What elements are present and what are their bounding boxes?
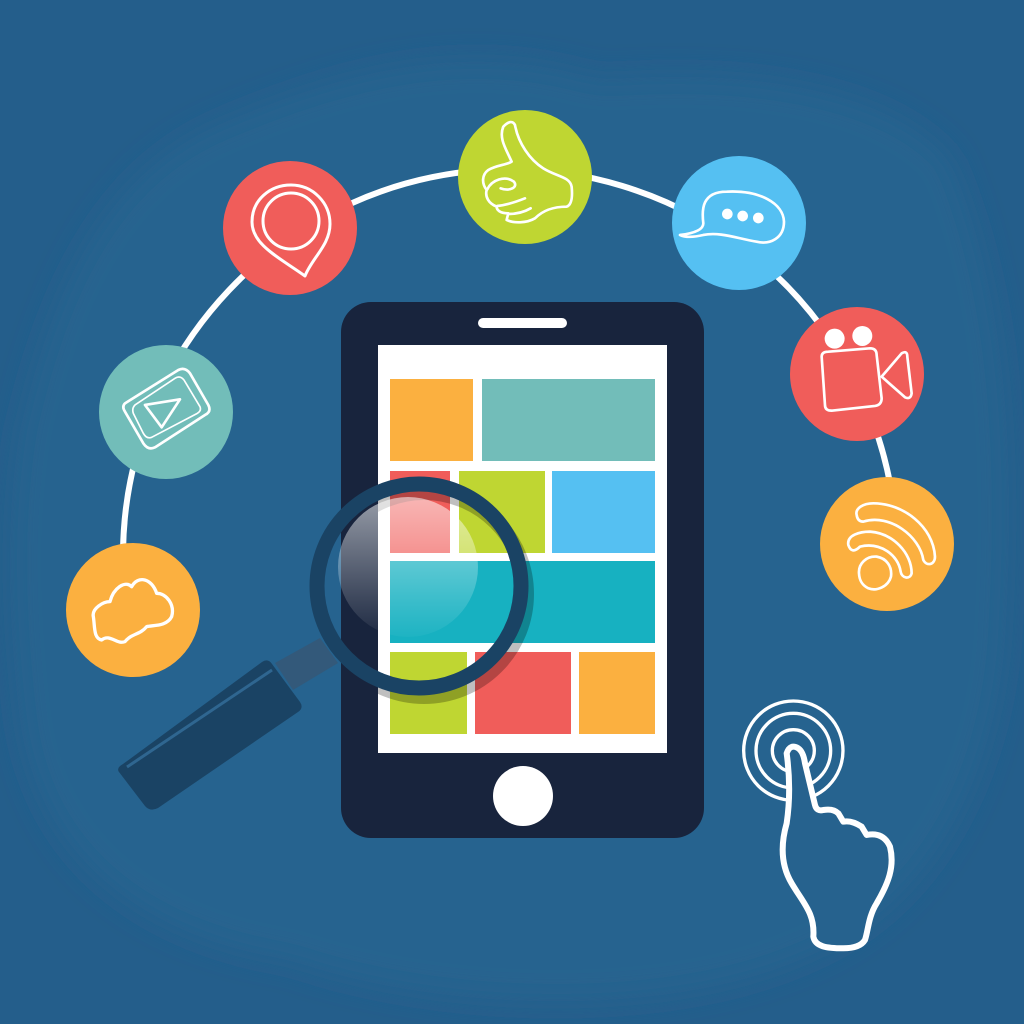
handle neck [275,638,338,690]
lens ring [317,484,521,688]
phone [341,302,704,838]
hand outline [783,747,892,948]
touch rings [744,701,843,800]
arc connecting icons [123,169,893,552]
icon: map pin [223,161,357,295]
phone home button [493,766,553,826]
ring shadow [378,492,534,704]
icon: tapping hand [744,701,892,948]
icon: video camera [790,307,924,441]
handle highlight [127,670,272,767]
phone speaker [478,318,567,328]
icon: thumbs up [458,110,592,244]
handle grip [118,660,302,810]
icon: speech bubble [672,156,806,290]
phone body [341,302,704,838]
phone screen [378,345,667,753]
icon: cloud [66,543,200,677]
lens highlight [338,497,478,637]
magnifying glass [118,484,526,810]
icon: video play [99,345,233,479]
icon: wifi [820,477,954,611]
